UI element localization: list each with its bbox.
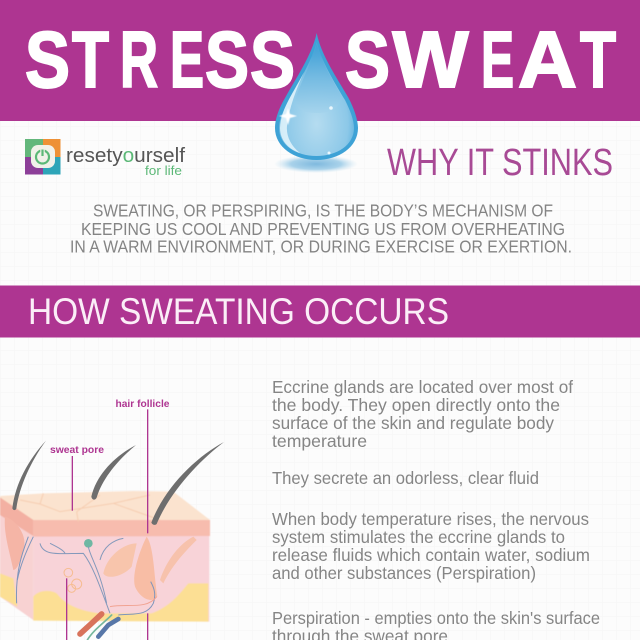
blood vessels (80, 614, 118, 640)
body text: system stimulates the eccrine glands to (272, 527, 565, 547)
icon: water drop (274, 33, 358, 173)
title: SWEAT (345, 15, 616, 104)
intro text (70, 200, 572, 256)
intro text: KEEPING US COOL AND PREVENTING US FROM OVERHEATING (81, 219, 565, 239)
body text: Eccrine glands are located over most of (272, 377, 573, 397)
title: STRESS: R (120, 15, 158, 104)
title: STRESS: S (205, 15, 249, 104)
label: hair follicle: hair follicle (116, 398, 170, 410)
logo mark (25, 139, 60, 174)
intro text: SWEATING, OR PERSPIRING, IS THE BODY’S MECHANISM OF (93, 200, 553, 220)
skin diagram (0, 409, 224, 640)
skin block (0, 491, 210, 622)
title: STRESS: S (250, 15, 295, 104)
section band: how sweating occurs (0, 286, 640, 338)
title: STRESS: T (72, 15, 109, 104)
title: STRESS: S (25, 15, 70, 104)
body text: Perspiration - empties onto the skin's surface (272, 608, 600, 628)
body text: surface of the skin and regulate body (272, 413, 554, 433)
title: SWEAT: S (345, 15, 390, 104)
title: STRESS (25, 15, 295, 104)
logo: reset yourself for life (25, 139, 185, 178)
glands and follicle (5, 517, 197, 600)
body text: and other substances (Perspiration) (272, 563, 536, 583)
label: sweat pore: sweat pore (50, 444, 104, 456)
intro text: IN A WARM ENVIRONMENT, OR DURING EXERCISE OR EXERTION. (70, 236, 572, 256)
header band (0, 0, 640, 121)
body text: the body. They open directly onto the (272, 395, 560, 415)
title: SWEAT: E (481, 15, 514, 104)
body text: They secrete an odorless, clear fluid (272, 468, 539, 488)
logo tagline: for life (145, 164, 182, 178)
section heading: HOW SWEATING OCCURS (28, 291, 449, 332)
title: SWEAT: A (518, 15, 577, 104)
body text: temperature (272, 431, 367, 451)
hairs (12, 441, 224, 525)
title: SWEAT: T (580, 15, 616, 104)
body text (272, 377, 600, 640)
body text: When body temperature rises, the nervous (272, 509, 589, 529)
title: STRESS: E (170, 15, 204, 104)
nerves and vessels (16, 537, 157, 615)
leader lines (67, 409, 148, 640)
title: SWEAT: W (392, 15, 469, 104)
body text: release fluids which contain water, sodium (272, 545, 590, 565)
logo wordmark: resetyourself (66, 145, 185, 167)
